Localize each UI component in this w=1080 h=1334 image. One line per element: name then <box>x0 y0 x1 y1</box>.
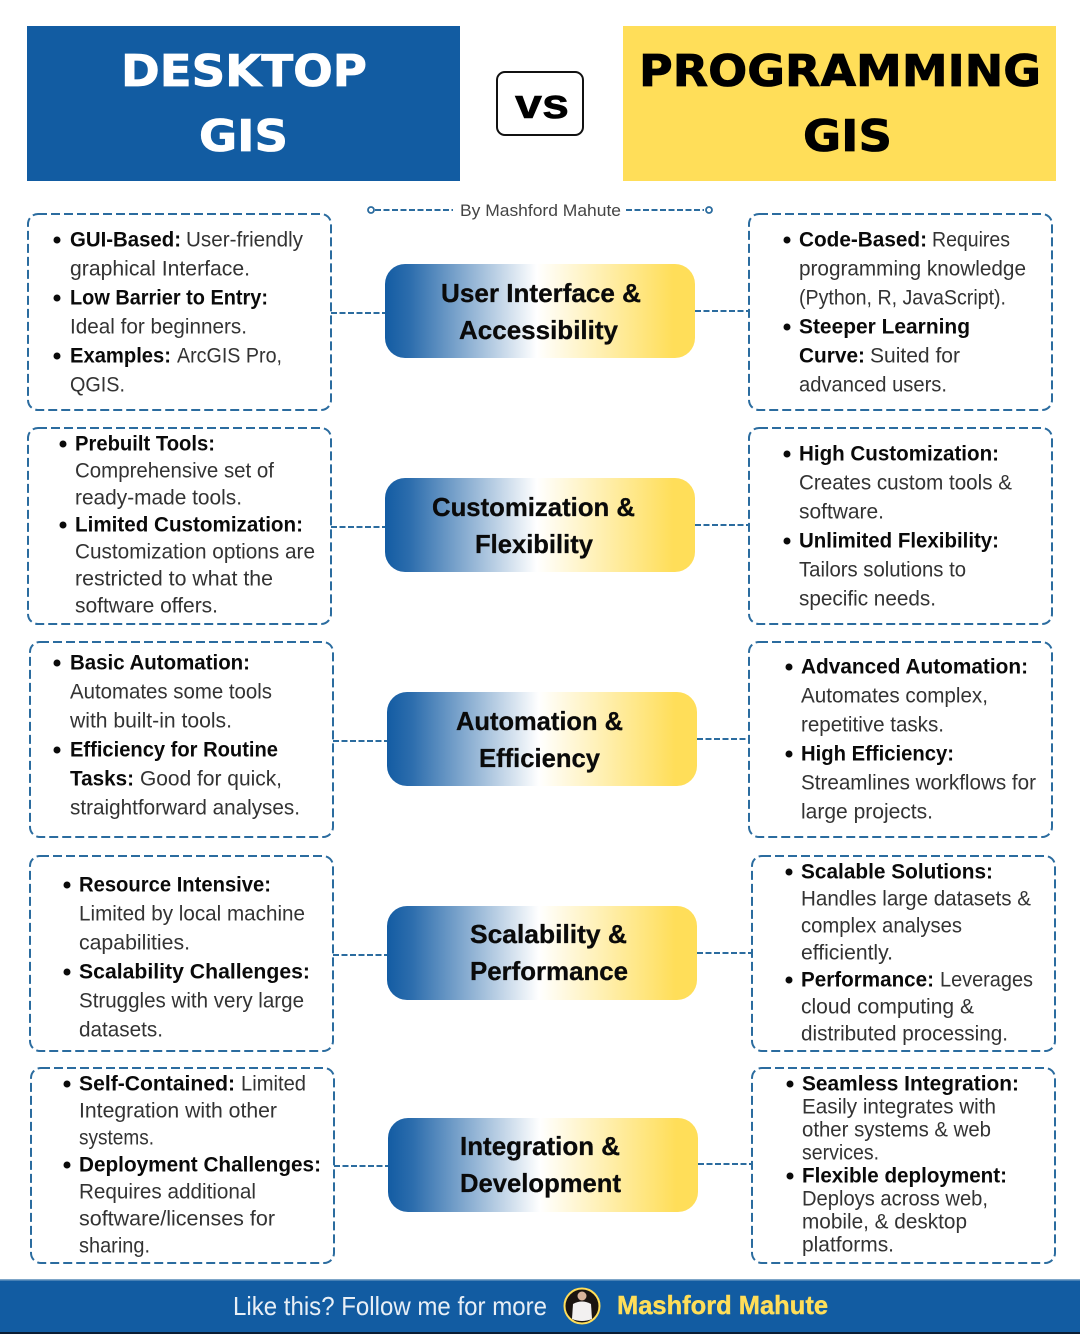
panel: desktop scalability: Limited by local machine <box>79 902 305 925</box>
panel: desktop user interface: Low Barrier to Entry: <box>70 286 268 309</box>
panel: desktop scalability: Scalability Challenges: <box>79 960 310 983</box>
panel: desktop user interface: GUI-Based: <box>70 228 181 251</box>
panel: programming integration: other systems & web <box>802 1118 991 1141</box>
connector: row 1 left <box>331 312 385 314</box>
connector: row 5 right <box>698 1163 752 1165</box>
panel: desktop integration: sharing. <box>79 1234 150 1257</box>
panel: programming user interface: (Python, R, JavaScript). <box>799 286 1006 309</box>
panel: programming integration: platforms. <box>802 1233 894 1256</box>
panel: programming user interface: Requires <box>932 228 1010 251</box>
panel: desktop customization <box>28 428 331 624</box>
panel: programming automation: Advanced Automation: <box>801 655 1028 678</box>
panel: desktop customization: Limited Customization: <box>75 513 303 536</box>
panel: programming customization <box>749 428 1052 624</box>
connector: row 5 left <box>334 1165 388 1167</box>
panel: programming integration: Flexible deployment: <box>802 1164 1007 1187</box>
panel: programming customization: High Customization: <box>799 442 999 465</box>
panel: desktop user interface: User-friendly <box>186 228 303 251</box>
panel: desktop scalability: capabilities. <box>79 931 190 954</box>
panel: desktop customization: Comprehensive set of <box>75 459 274 482</box>
category: integration and development: Development <box>460 1168 621 1198</box>
header: Desktop GIS: DESKTOP <box>121 46 367 97</box>
panel: programming integration: Easily integrates with <box>802 1095 996 1118</box>
panel: desktop automation <box>30 642 333 837</box>
panel: desktop integration: systems. <box>79 1126 154 1149</box>
panel: desktop user interface: Examples: <box>70 344 171 367</box>
panel: desktop automation: straightforward analyses. <box>70 796 300 819</box>
panel: desktop scalability: Struggles with very large <box>79 989 304 1012</box>
header: Desktop GIS: GIS <box>199 111 288 162</box>
category: customization and flexibility: Flexibility <box>475 529 594 559</box>
category: integration and development: Integration & <box>460 1131 620 1161</box>
panel: programming scalability: complex analyses <box>801 914 962 937</box>
badge: vs <box>497 72 583 135</box>
category: customization and flexibility <box>385 478 695 572</box>
connector: row 3 left <box>333 740 387 742</box>
panel: programming scalability: efficiently. <box>801 941 893 964</box>
panel: programming integration: Deploys across web, <box>802 1187 988 1210</box>
panel: programming automation: repetitive tasks. <box>801 713 944 736</box>
panel: desktop integration: Limited <box>241 1072 306 1095</box>
panel: desktop customization: Customization options are <box>75 540 315 563</box>
panel: programming integration: mobile, & desktop <box>802 1210 967 1233</box>
panel: programming customization: Creates custom tools & <box>799 471 1012 494</box>
header: Programming GIS <box>623 26 1056 181</box>
byline <box>368 201 712 220</box>
panel: desktop user interface: ArcGIS Pro, <box>177 344 282 367</box>
panel: desktop integration: Integration with other <box>79 1099 277 1122</box>
footer bar <box>0 1279 1080 1334</box>
panel: desktop automation: Good for quick, <box>140 767 282 790</box>
panel: programming automation: Automates complex, <box>801 684 988 707</box>
category: scalability and performance: Scalability & <box>470 919 627 949</box>
panel: programming user interface: advanced users. <box>799 373 947 396</box>
panel: programming customization: software. <box>799 500 884 523</box>
panel: programming customization: specific needs. <box>799 587 936 610</box>
panel: desktop scalability: datasets. <box>79 1018 163 1041</box>
panel: programming automation: Streamlines workflows for <box>801 771 1036 794</box>
panel: programming user interface: Steeper Learning <box>799 315 970 338</box>
panel: programming user interface <box>749 214 1052 410</box>
panel: programming integration: services. <box>802 1141 879 1164</box>
footer bar: Mashford Mahute <box>617 1290 828 1320</box>
panel: desktop customization: ready-made tools. <box>75 486 242 509</box>
panel: programming automation: large projects. <box>801 800 933 823</box>
panel: programming customization: Tailors solutions to <box>799 558 966 581</box>
panel: desktop customization: software offers. <box>75 594 218 617</box>
panel: desktop customization: Prebuilt Tools: <box>75 432 215 455</box>
panel: desktop customization: restricted to what the <box>75 567 273 590</box>
panel: programming user interface: Curve: <box>799 344 865 367</box>
panel: desktop automation: Efficiency for Routine <box>70 738 278 761</box>
panel: programming integration: Seamless Integration: <box>802 1072 1019 1095</box>
panel: programming scalability: Performance: <box>801 968 934 991</box>
connector: row 1 right <box>695 310 749 312</box>
connector: row 3 right <box>697 738 749 740</box>
panel: programming customization: Unlimited Flexibility: <box>799 529 999 552</box>
panel: programming scalability: Scalable Solutions: <box>801 860 993 883</box>
panel: programming scalability: distributed processing. <box>801 1022 1008 1045</box>
panel: desktop scalability: Resource Intensive: <box>79 873 271 896</box>
header: Desktop GIS <box>27 26 460 181</box>
category: scalability and performance: Performance <box>470 956 628 986</box>
panel: desktop integration <box>31 1068 334 1263</box>
category: automation and efficiency <box>387 692 697 786</box>
panel: desktop automation: Automates some tools <box>70 680 272 703</box>
connector: row 4 right <box>697 952 752 954</box>
panel: programming integration <box>752 1068 1055 1263</box>
panel: programming scalability: Handles large datasets & <box>801 887 1031 910</box>
category: user interface and accessibility <box>385 264 695 358</box>
header: Programming GIS: PROGRAMMING <box>639 46 1041 97</box>
connector: row 2 right <box>695 524 749 526</box>
panel: desktop scalability <box>30 856 333 1051</box>
category: customization and flexibility: Customization & <box>432 492 635 522</box>
panel: programming scalability: cloud computing & <box>801 995 974 1018</box>
connector: row 4 left <box>333 954 387 956</box>
panel: desktop user interface: Ideal for beginners. <box>70 315 247 338</box>
category: user interface and accessibility: Accessibility <box>459 315 619 345</box>
panel: desktop automation: Basic Automation: <box>70 651 250 674</box>
panel: desktop user interface <box>28 214 331 410</box>
category: automation and efficiency: Automation & <box>456 706 623 736</box>
panel: programming scalability: Leverages <box>940 968 1033 991</box>
panel: desktop integration: Requires additional <box>79 1180 256 1203</box>
panel: programming automation: High Efficiency: <box>801 742 954 765</box>
category: user interface and accessibility: User Interface & <box>441 278 641 308</box>
badge: vs: vs <box>515 80 569 127</box>
panel: desktop user interface: graphical Interface. <box>70 257 250 280</box>
icon: author portrait <box>564 1288 600 1324</box>
panel: desktop automation: Tasks: <box>70 767 134 790</box>
panel: programming user interface: Code-Based: <box>799 228 927 251</box>
panel: desktop integration: software/licenses for <box>79 1207 275 1230</box>
panel: programming scalability <box>752 856 1055 1051</box>
category: scalability and performance <box>387 906 697 1000</box>
panel: desktop integration: Self-Contained: <box>79 1072 235 1095</box>
byline: By Mashford Mahute <box>460 201 621 220</box>
panel: programming user interface: Suited for <box>870 344 960 367</box>
panel: programming user interface: programming knowledge <box>799 257 1026 280</box>
header: Programming GIS: GIS <box>803 111 892 162</box>
category: automation and efficiency: Efficiency <box>479 743 601 773</box>
panel: desktop user interface: QGIS. <box>70 373 125 396</box>
category: integration and development <box>388 1118 698 1212</box>
panel: programming automation <box>749 642 1052 837</box>
footer bar: Like this? Follow me for more <box>233 1291 547 1321</box>
panel: desktop integration: Deployment Challenges: <box>79 1153 321 1176</box>
panel: desktop automation: with built-in tools. <box>69 709 232 732</box>
connector: row 2 left <box>331 526 385 528</box>
